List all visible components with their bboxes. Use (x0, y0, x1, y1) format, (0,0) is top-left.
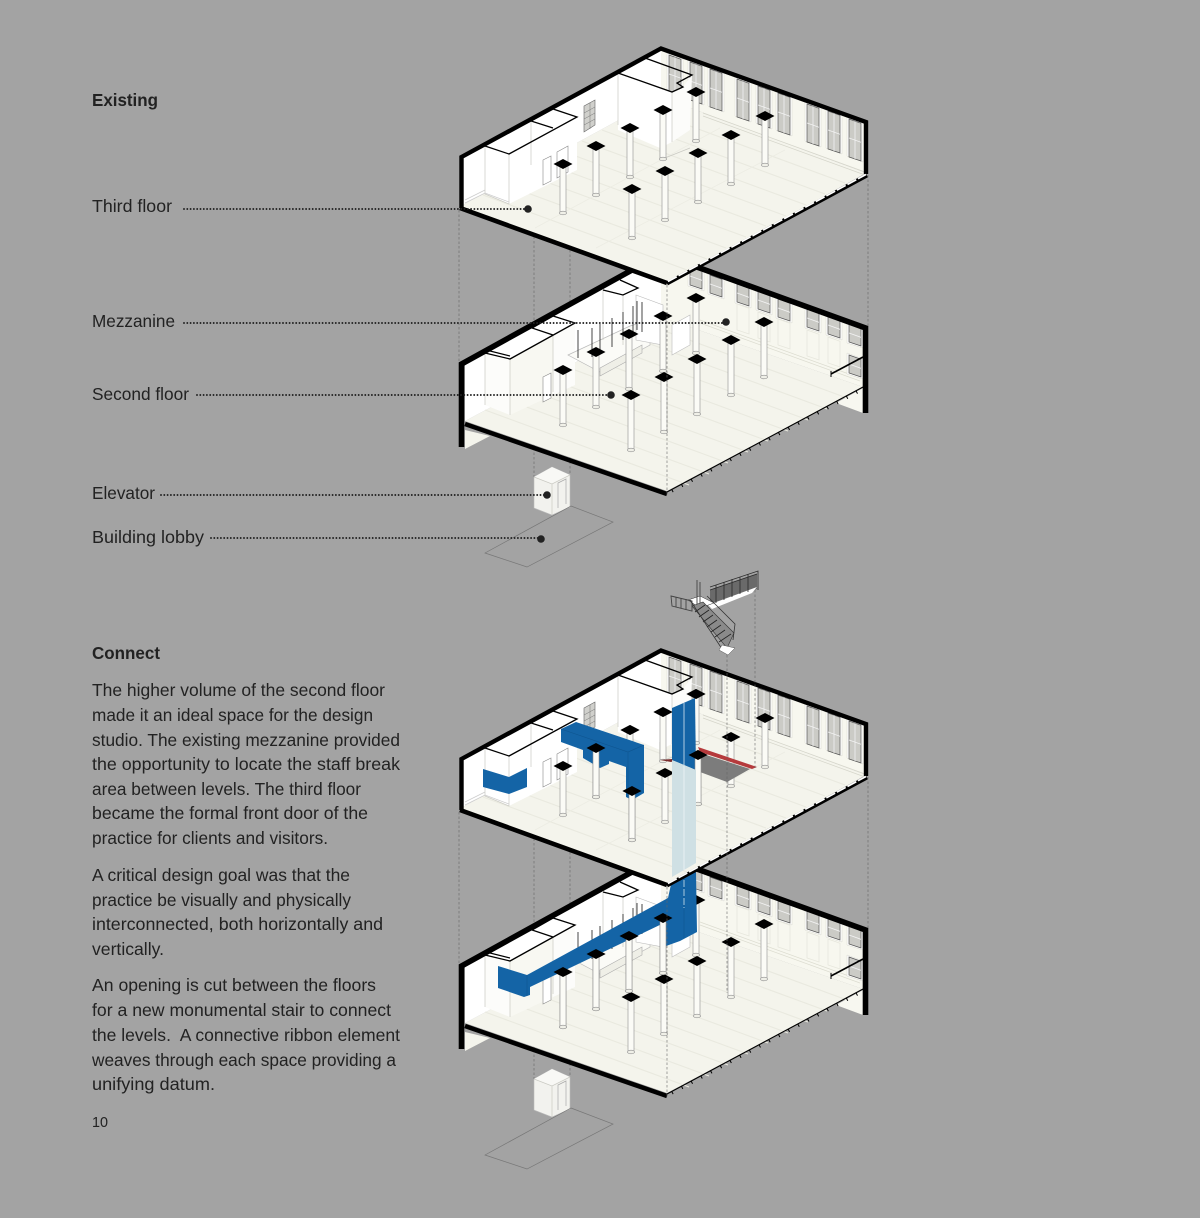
existing: third floor axonometric (460, 48, 867, 284)
icon: monumental stair exploded (671, 571, 758, 655)
body text: connect description: unifying datum. (92, 1074, 215, 1094)
body text: connect description: for a new monumental stair to connect (92, 1000, 391, 1020)
leader: building lobby (211, 535, 545, 543)
connect: second floor blue ribbon (498, 872, 697, 1029)
existing: front dashed guides (459, 175, 868, 495)
body text: connect description: An opening is cut between the floors (92, 975, 376, 995)
label: Mezzanine: Mezzanine (92, 311, 175, 331)
page number: 10 (92, 1114, 108, 1131)
heading: Existing: Existing (92, 90, 158, 110)
connect: building lobby outline (485, 1108, 613, 1169)
label: Third floor: Third floor (92, 196, 172, 216)
leader: mezzanine (184, 318, 730, 326)
existing: second floor axonometric (462, 254, 866, 494)
body text: connect description: The higher volume of the second floor (92, 680, 385, 700)
connect: elevator (534, 1069, 570, 1117)
leader: elevator (161, 491, 551, 499)
connect: third floor blue ribbon (483, 689, 708, 842)
connect: third floor axonometric (460, 650, 867, 886)
body text: connect description: the opportunity to locate the staff break (92, 754, 400, 774)
existing: elevator (534, 467, 570, 515)
body text: connect description: studio. The existing mezzanine provided (92, 730, 400, 750)
leader: second floor (197, 391, 615, 399)
connect: third floor floor opening (660, 747, 757, 782)
heading: Connect: Connect (92, 643, 160, 663)
body text: connect description: interconnected, both horizontally and (92, 914, 383, 934)
body text: connect description: practice for clients and visitors. (92, 828, 328, 848)
label: Second floor: Second floor (92, 384, 189, 404)
body text: connect description (91, 680, 400, 1094)
connect: second floor axonometric (462, 856, 866, 1096)
leader: third floor (184, 205, 532, 213)
existing: building lobby outline (485, 506, 613, 567)
body text: connect description: area between levels. The third floor (92, 779, 361, 799)
connect: rear dashed guides (534, 834, 570, 1079)
existing: rear dashed guides (534, 232, 570, 477)
body text: connect description: became the formal front door of the (92, 803, 368, 823)
body text: connect description: made it an ideal space for the design (92, 705, 373, 725)
body text: connect description: A critical design goal was that the (92, 865, 350, 885)
body text: connect description: practice be visually and physically (92, 890, 351, 910)
body text: connect description: vertically. (92, 939, 164, 959)
label: Building lobby: Building lobby (92, 527, 204, 547)
body text: connect description: weaves through each space providing a (91, 1050, 396, 1070)
body text: connect description: the levels. A connective ribbon element (92, 1025, 400, 1045)
connect: translucent stair void (672, 760, 696, 877)
connect: front dashed guides (459, 590, 868, 1097)
label: Elevator: Elevator (92, 483, 155, 503)
